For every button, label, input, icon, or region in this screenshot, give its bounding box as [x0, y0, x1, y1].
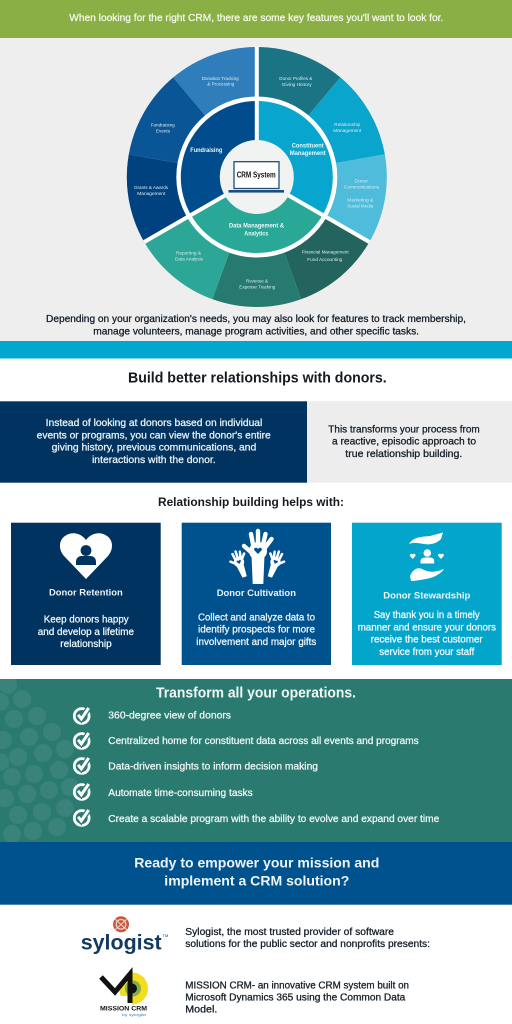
logo: mission crm: MISSION CRM — [100, 1006, 147, 1013]
text block: mission crm description: Microsoft Dynamics 365 using the Common Data — [185, 993, 406, 1004]
wheel labels: outer segments: Marketing & — [347, 198, 374, 203]
list: operations benefits: 360-degree view of donors — [108, 710, 231, 721]
text block: mission crm description: Model. — [185, 1005, 217, 1016]
wheel labels: outer segments: Financial Management — [302, 249, 349, 254]
panel: call to action: implement a CRM solution? — [164, 873, 349, 889]
heading: build better relationships: Build better relationships with donors. — [128, 370, 387, 386]
panel: donor cultivation card: identify prospects for more — [198, 625, 315, 636]
divider band: blue — [0, 341, 512, 358]
wheel labels: outer segments: Donor Profiles & — [279, 76, 313, 81]
wheel labels: outer segments: Donor — [354, 179, 368, 184]
panel: donor view statement: giving history, previous communications, and — [52, 443, 257, 454]
wheel labels: inner segments: Data Management & — [229, 223, 284, 230]
chart: CRM system wheel — [127, 47, 387, 307]
wheel labels: outer segments: Relationship — [334, 122, 361, 127]
wheel labels: inner segments: Constituent — [292, 143, 324, 150]
text block: mission crm description: MISSION CRM- an innovative CRM system built on — [185, 980, 409, 991]
wheel labels: outer segments: Reporting & — [176, 251, 202, 256]
icon: laptop with CRM System label: CRM System — [237, 171, 276, 180]
panel: donor view statement: Instead of looking at donors based on individual — [46, 418, 262, 429]
list: operations benefits — [108, 710, 440, 825]
wheel labels: outer segments: Giving History — [282, 82, 312, 87]
text block: sylogist description: Sylogist, the most trusted provider of software — [185, 927, 394, 938]
logo: mission crm — [100, 972, 148, 1017]
wheel labels: outer segments: Fund Accounting — [307, 257, 343, 262]
panel: donor cultivation card: involvement and major gifts — [196, 637, 316, 648]
logo: sylogist — [81, 916, 168, 954]
list: operations benefits: Centralized home for constituent data across all events and programs — [108, 736, 419, 747]
wheel labels: outer segments: & Processing — [207, 82, 235, 87]
wheel labels: outer segments: Social Media — [347, 203, 374, 208]
panel: donor cultivation card: Donor Cultivation — [217, 588, 296, 599]
panel: call to action: Ready to empower your mission and — [134, 855, 379, 871]
panel: donor retention card: and develop a lifetime — [38, 627, 134, 638]
logo: sylogist: sylogist — [81, 930, 162, 954]
panel: donor retention card — [11, 523, 161, 665]
icon: heart with person — [60, 533, 112, 579]
text block: additional features note — [46, 314, 466, 337]
wheel labels: outer segments: Donation Tracking — [202, 76, 239, 81]
panel: donor stewardship card: service from your staff — [379, 647, 475, 658]
wheel labels: outer segments — [134, 76, 380, 290]
wheel labels: outer segments: Fundraising — [151, 123, 175, 128]
heading: transform all your operations: Transform all your operations. — [156, 686, 356, 702]
list: operations benefits: Automate time-consuming tasks — [108, 788, 253, 799]
panel: donor view statement: events or programs, you can view the donor's entire — [37, 430, 271, 441]
wheel labels: inner segments: Management — [290, 150, 326, 157]
logo: sylogist: TM — [162, 933, 168, 938]
text block: sylogist description: solutions for the public sector and nonprofits presents: — [185, 939, 430, 950]
icon: laptop with CRM System label — [228, 162, 284, 193]
wheel labels: outer segments: Expense Tracking — [239, 285, 276, 290]
wheel labels: inner segments: Analytics — [244, 230, 268, 237]
panel: donor stewardship card: Donor Stewardship — [383, 591, 470, 602]
list: operations benefits: Data-driven insights to inform decision making — [108, 762, 318, 773]
panel: donor retention card: relationship — [60, 639, 112, 650]
panel: call to action — [0, 842, 512, 905]
wheel labels: outer segments: Communications — [344, 185, 380, 190]
panel: donor view statement — [0, 401, 307, 483]
heading: relationship building helps with: Relationship building helps with: — [158, 495, 344, 509]
panel: process transformation statement — [307, 401, 512, 483]
panel: process transformation statement: This transforms your process from — [328, 424, 480, 435]
text block: sylogist description — [185, 927, 430, 950]
wheel labels: outer segments: Management — [137, 191, 166, 196]
wheel labels: outer segments: Revenue & — [246, 279, 269, 284]
panel: donor cultivation card: Collect and analyze data to — [198, 612, 315, 623]
panel: transform operations — [0, 676, 512, 843]
panel: donor view statement: interactions with the donor. — [92, 455, 216, 466]
wheel labels: outer segments: Data Analysis — [175, 256, 204, 261]
panel: donor stewardship card: manner and ensure your donors — [358, 622, 496, 633]
text block: additional features note: Depending on your organization's needs, you may also look for features to track membership, — [46, 314, 466, 325]
icons: check marks — [74, 708, 89, 825]
list: operations benefits: Create a scalable program with the ability to evolve and expand over time — [108, 814, 440, 825]
text block: mission crm description — [185, 980, 409, 1016]
wheel labels: outer segments: Events — [156, 128, 171, 133]
panel: donor stewardship card — [352, 523, 502, 665]
wheel labels: inner segments: Fundraising — [190, 147, 222, 154]
text block: additional features note: manage volunteers, manage program activities, and other specific tasks. — [93, 326, 419, 337]
panel: donor cultivation card — [182, 523, 331, 665]
panel: top header band — [0, 0, 512, 38]
panel: donor retention card: Keep donors happy — [44, 615, 129, 626]
wheel labels: outer segments: Grants & Awards — [134, 185, 169, 190]
icon: caring hands around person — [409, 532, 444, 581]
wheel labels: outer segments: Management — [333, 128, 362, 133]
panel: process transformation statement: a reactive, episodic approach to — [332, 437, 476, 448]
panel: top header band: When looking for the right CRM, there are some key features you'll want to look for. — [69, 13, 443, 24]
panel: donor stewardship card: Say thank you in a timely — [374, 610, 480, 621]
logo: mission crm: by sylogist — [122, 1012, 147, 1017]
icon: raised hands with hearts — [228, 531, 287, 584]
panel: CRM features wheel section — [0, 38, 512, 341]
panel: process transformation statement: true relationship building. — [345, 449, 462, 460]
wheel labels: inner segments — [190, 143, 326, 237]
panel: donor retention card: Donor Retention — [49, 588, 123, 599]
panel: donor stewardship card: receive the best customer — [371, 635, 483, 646]
